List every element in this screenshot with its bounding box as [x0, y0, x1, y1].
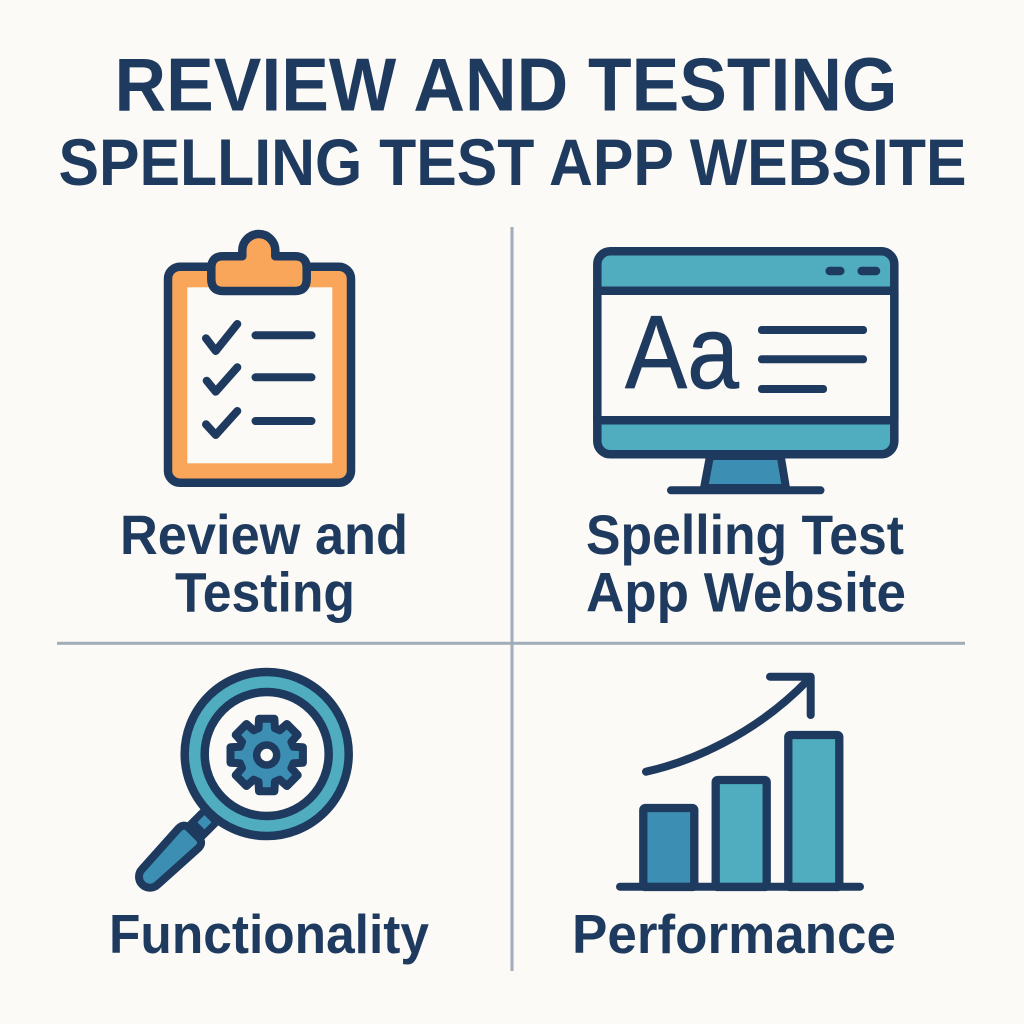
- label: app website: App Website: [586, 560, 906, 624]
- icon: performance bar chart: [620, 677, 860, 887]
- label: testing: Testing: [175, 560, 355, 624]
- title: REVIEW AND TESTING: [114, 42, 898, 126]
- icon: clipboard checklist: [168, 234, 351, 483]
- icon: website monitor: [597, 251, 894, 490]
- label: functionality: Functionality: [109, 903, 429, 965]
- label: review and: Review and: [120, 503, 408, 566]
- handle: [132, 800, 226, 894]
- title: SPELLING TEST APP WEBSITE: [58, 125, 966, 199]
- gear: [231, 719, 303, 791]
- icon: website monitor: Aa: [625, 295, 739, 411]
- icon: magnifier with gear: [132, 672, 349, 894]
- title: [58, 42, 966, 199]
- label: performance: Performance: [572, 903, 896, 965]
- label: spelling test: Spelling Test: [586, 503, 904, 566]
